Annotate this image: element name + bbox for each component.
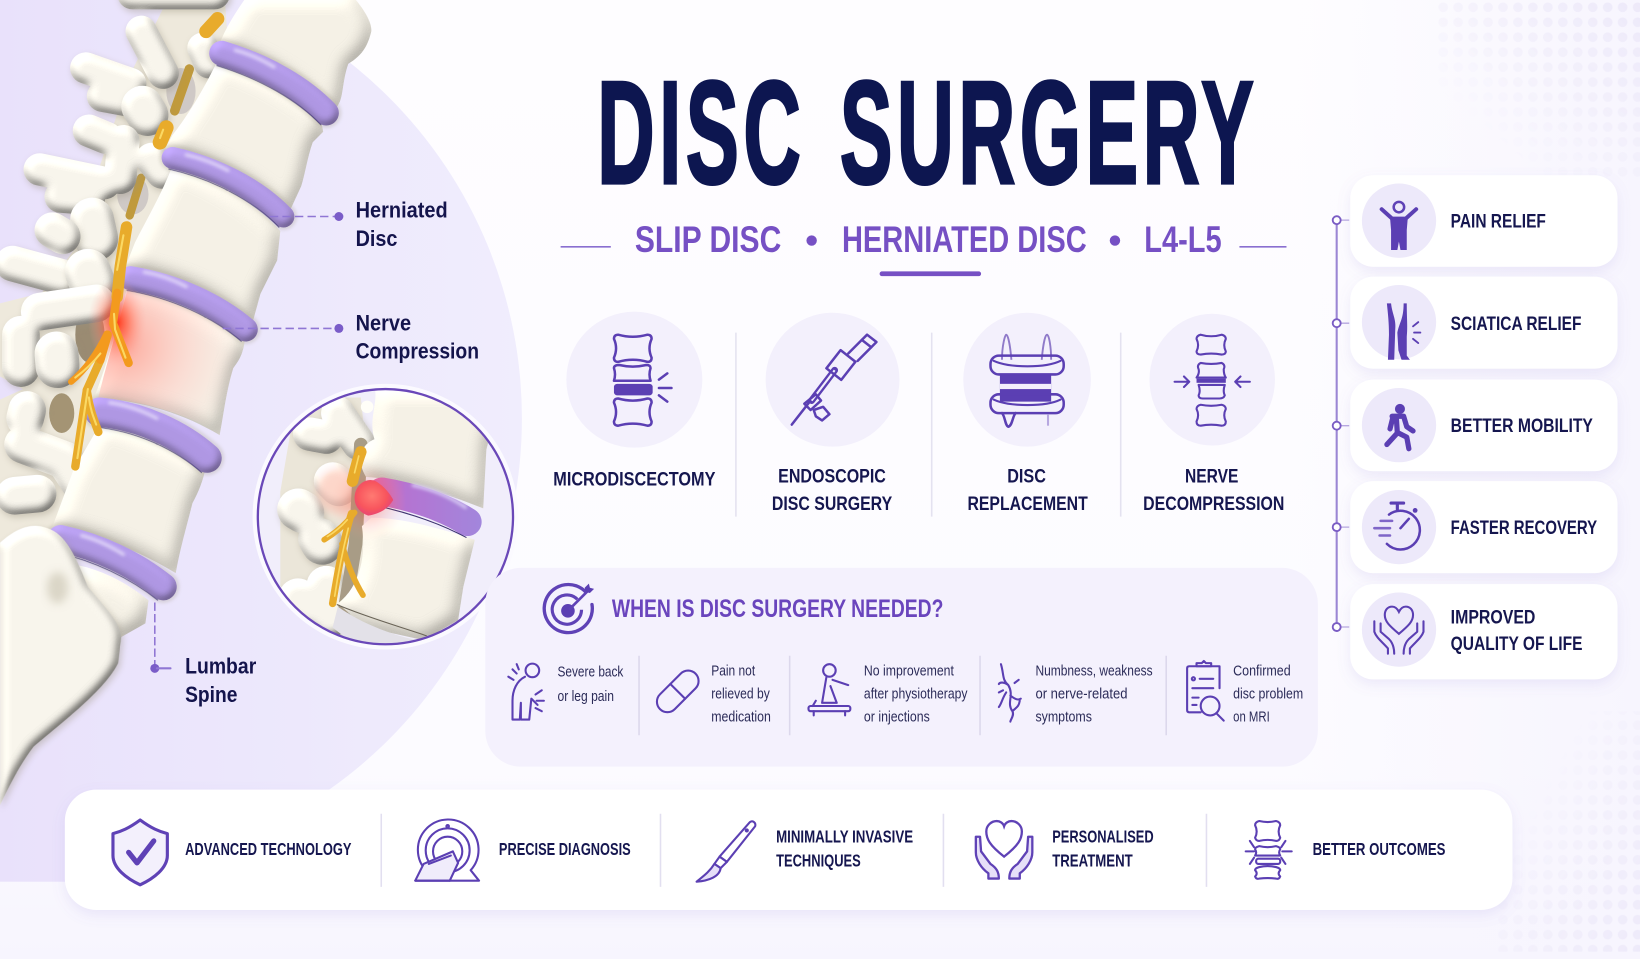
- callout: lumbar spine: Spine: [185, 682, 237, 707]
- upper vertebral process: [86, 0, 214, 100]
- inset lower vertebra: [338, 518, 475, 640]
- second facet lump: [92, 220, 96, 238]
- callout: herniated disc: Herniated: [356, 198, 448, 223]
- criterion: severe pain: [508, 664, 624, 720]
- icon: patient on treatment bed: [808, 664, 850, 715]
- callout: herniated disc: [270, 198, 448, 251]
- lower left process: [21, 303, 96, 368]
- procedures row: [553, 312, 1284, 517]
- icon: clipboard and magnifier: [1187, 661, 1224, 721]
- inset glow: [341, 472, 400, 534]
- title: DISC: [597, 51, 805, 215]
- benefit: personalised treatment: PERSONALISED: [1052, 826, 1154, 846]
- criterion: physiotherapy: after physiotherapy: [864, 687, 968, 703]
- subtitle row: [561, 219, 1286, 276]
- icon: artificial disc: [990, 335, 1064, 427]
- spinal canal openings: [49, 68, 196, 433]
- inset: magnified herniated disc: [251, 382, 523, 654]
- card: faster recovery: [1350, 481, 1618, 573]
- icon: nerve: [999, 664, 1021, 722]
- criterion: numbness: or nerve-related: [1035, 687, 1127, 703]
- benefit: better outcomes: BETTER OUTCOMES: [1313, 839, 1445, 859]
- icon: MRI scanner: [415, 819, 479, 881]
- inset disc: [382, 492, 468, 522]
- spine illustration: [0, 0, 371, 805]
- criterion: physiotherapy: [808, 664, 968, 726]
- icon: scalpel: [697, 821, 755, 882]
- icon: healthy spine: [1246, 821, 1292, 879]
- card: improved quality of life: IMPROVED: [1451, 606, 1535, 628]
- sacrum: [0, 526, 121, 805]
- criterion: MRI: on MRI: [1233, 710, 1270, 726]
- benefit: minimally invasive: MINIMALLY INVASIVE: [776, 826, 913, 846]
- timeline connector: [1333, 216, 1349, 631]
- heading: WHEN IS DISC SURGERY NEEDED?: [612, 595, 943, 623]
- benefit: advanced technology: ADVANCED TECHNOLOGY: [185, 839, 352, 859]
- callout: nerve compression: [223, 311, 479, 364]
- benefit: minimally invasive: [697, 821, 913, 882]
- lavender left strip: [0, 628, 73, 882]
- criterion: medication: [653, 664, 771, 726]
- right side tint: [1297, 0, 1640, 959]
- card: sciatica relief: [1350, 277, 1618, 369]
- lavender circle backdrop: [0, 0, 522, 872]
- procedure: endoscopic disc surgery: DISC SURGERY: [772, 493, 892, 515]
- inset canal: [345, 445, 361, 607]
- subtitle row: SLIP DISC: [635, 219, 781, 260]
- criterion: numbness: Numbness, weakness: [1035, 664, 1153, 680]
- procedure: nerve decompression: NERVE: [1185, 466, 1238, 488]
- lower facet lump: [56, 354, 58, 366]
- halftone dots bottom right: [1588, 856, 1640, 952]
- procedure: endoscopic disc surgery: [766, 313, 899, 515]
- title: SURGERY: [840, 51, 1258, 215]
- icon: spine with removed disc: [614, 335, 671, 426]
- criterion: medication: relieved by: [711, 687, 770, 703]
- icon: legs with pain rays: [1387, 303, 1420, 360]
- icon: heart in hands: [1374, 607, 1423, 654]
- disc highlights: [82, 50, 274, 554]
- callout: nerve compression: Nerve: [356, 311, 411, 336]
- procedure: disc replacement: DISC: [1007, 466, 1046, 488]
- criterion: severe pain: or leg pain: [557, 689, 614, 705]
- bone mass behind processes: [0, 0, 230, 554]
- icon: heart and hands: [976, 821, 1032, 879]
- halftone dots top right: [1490, 2, 1640, 86]
- second vertebral process: [40, 131, 162, 199]
- procedure: nerve decompression: DECOMPRESSION: [1143, 493, 1284, 515]
- criterion: MRI: disc problem: [1233, 687, 1303, 703]
- procedure: microdiscectomy: MICRODISCECTOMY: [553, 468, 715, 490]
- criterion: severe pain: Severe back: [557, 665, 624, 681]
- procedure: nerve decompression: [1143, 314, 1284, 515]
- callout: nerve compression: Compression: [356, 339, 479, 364]
- benefit: minimally invasive: TECHNIQUES: [776, 851, 861, 871]
- callout: herniated disc: Disc: [356, 226, 397, 251]
- criterion: MRI: Confirmed: [1233, 664, 1291, 680]
- criterion: numbness: symptoms: [1035, 710, 1092, 726]
- criterion: physiotherapy: No improvement: [864, 664, 954, 680]
- benefit: better outcomes: [1246, 821, 1445, 879]
- icon: raised-arms figure: [1382, 202, 1416, 250]
- procedure: microdiscectomy: [553, 312, 715, 490]
- title: [597, 51, 1258, 215]
- card: pain relief: PAIN RELIEF: [1451, 210, 1546, 232]
- benefit: precise diagnosis: PRECISE DIAGNOSIS: [499, 839, 631, 859]
- upper facet lump: [142, 107, 147, 115]
- benefit: precise diagnosis: [415, 819, 631, 881]
- subtitle row: HERNIATED DISC: [842, 219, 1087, 260]
- inset upper vertebra: [362, 390, 488, 508]
- procedure: endoscopic disc surgery: ENDOSCOPIC: [778, 466, 886, 488]
- criterion: physiotherapy: or injections: [864, 710, 930, 726]
- icon: walking figure: [1387, 404, 1413, 449]
- card: sciatica relief: SCIATICA RELIEF: [1451, 313, 1582, 335]
- criterion: medication: Pain not: [711, 664, 755, 680]
- icon: shield check: [113, 820, 167, 885]
- procedure: disc replacement: [963, 313, 1091, 515]
- icon: stopwatch: [1374, 503, 1420, 549]
- icon: person with back pain: [508, 664, 544, 720]
- third facet lump: [88, 272, 92, 282]
- disc lower edge lines: [55, 65, 321, 600]
- card: better mobility: BETTER MOBILITY: [1451, 415, 1593, 437]
- vertebrae bodies: [220, 0, 371, 117]
- callout: lumbar spine: Lumbar: [185, 654, 257, 679]
- panel: when is disc surgery needed: [485, 568, 1318, 767]
- lowest process: [15, 410, 86, 496]
- icon: endoscope: [792, 335, 876, 425]
- card: improved quality of life: [1350, 584, 1618, 679]
- benefit: advanced technology: [113, 820, 352, 885]
- icon: pill: [653, 666, 703, 716]
- subtitle row: L4-L5: [1144, 219, 1222, 260]
- purple discs: [61, 53, 326, 587]
- icon: decompressed spine: [1175, 335, 1250, 426]
- card: better mobility: [1350, 380, 1618, 471]
- inset nerves: [324, 452, 363, 603]
- card: improved quality of life: QUALITY OF LIFE: [1451, 633, 1583, 655]
- criterion: medication: medication: [711, 710, 771, 726]
- inset posterior bone: [280, 397, 366, 638]
- yellow nerves: [71, 19, 218, 466]
- third vertebral process: [13, 230, 63, 277]
- icon: target: [544, 584, 594, 633]
- bottom benefits bar: [65, 790, 1512, 910]
- card: faster recovery: FASTER RECOVERY: [1451, 517, 1597, 539]
- red compression glow: [88, 278, 146, 366]
- card: pain relief: [1350, 175, 1618, 267]
- criterion: numbness: [999, 664, 1153, 726]
- inset bulge: [355, 480, 393, 516]
- disc contact shadows: [61, 53, 326, 587]
- callout: lumbar spine: [150, 602, 257, 707]
- benefit: personalised treatment: TREATMENT: [1052, 851, 1133, 871]
- benefit: personalised treatment: [976, 821, 1154, 879]
- procedure: disc replacement: REPLACEMENT: [967, 493, 1088, 515]
- criterion: MRI: [1187, 661, 1303, 726]
